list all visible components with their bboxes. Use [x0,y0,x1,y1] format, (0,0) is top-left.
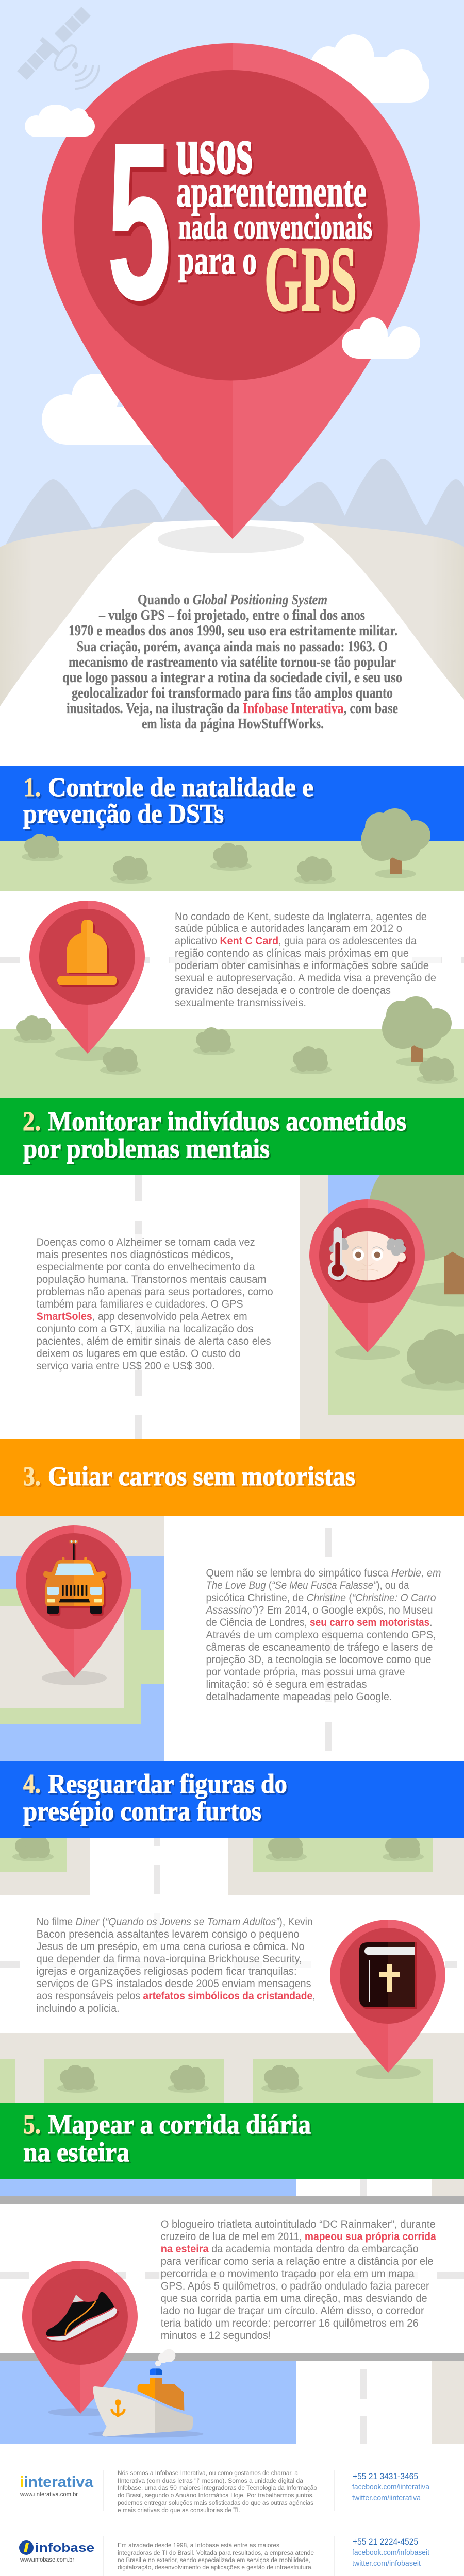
footer: iinterativa logo: i [20,2474,24,2490]
footer: infobase description: integradoras de TI do Brasil. Voltada para resultados, a empresa atende [118,2550,314,2556]
title words: para o [178,238,257,282]
icon: running shoe [46,2292,119,2342]
section 2 body text: problemas não apenas para seus portadores, como [37,1286,273,1298]
section 2 road dashes [135,1175,142,1439]
section 3 body text: Quem não se lembra do simpático fusca Herbie, em [206,1567,441,1579]
footer: infobase logo [19,2540,94,2563]
panel: section 2 map [300,1124,464,1439]
section 1 body text: gravidez não desejada e o controle de doenças [175,985,391,996]
section 5 body text: que sua corrida partia em uma direção, mas desviando de [161,2293,427,2304]
section 4 body text: incluindo a polícia. [37,2003,120,2014]
intro text: que logo passou a integrar a rotina da sociedade civil, e seu uso [62,670,402,686]
pin 1 with condom icon [29,901,145,1054]
heading 5: 5. [23,2110,41,2140]
heading 2: 2. [23,1107,41,1137]
panel: section 5 map [0,2179,464,2444]
panel: section 4 map bottom [0,2033,464,2103]
icon: big map pin [42,43,420,539]
section 1 body text: região contendo as clínicas mais próximas em que [175,947,409,959]
cloud: top right [309,34,429,103]
section 2 body text: população humana. Transtornos mentais causam [37,1274,267,1285]
heading 5 [23,2110,311,2167]
section 5 body text: O blogueiro triatleta autointitulado “DC Rainmaker”, durante [161,2218,436,2230]
section 2 body text [37,1236,273,1372]
footer: infobase description [118,2543,314,2571]
section 3 body text: por vontade própria, mas possui uma grave [206,1666,405,1678]
section 3 body text: limitação: só é segura em estradas [206,1679,367,1690]
section 3 body text: projeção 3D, a tecnologia se locomove como que [206,1654,431,1666]
footer: iinterativa logo: interativa [24,2474,94,2490]
section 4 body text: aos responsáveis pelos artefatos simbólicos da cristandade, [37,1990,316,2002]
panel: section 1 header [0,766,464,841]
panel: hero background sky [0,0,464,567]
icon: elderly man face and thermometer [328,1227,407,1282]
heading 1: 1. [24,773,41,803]
title number 5: 5 [107,96,172,347]
footer: infobase contacts [352,2537,430,2568]
title words: usos [176,114,253,188]
section 2 body text: conjunto com a GTX, auxilia na localização dos [37,1323,254,1335]
pin 1 shadow [55,1046,120,1061]
section 5 body text: teria batido um recorde: percorrer 16 quilômetros em 26 [161,2317,419,2329]
heading 4: Resguardar figuras do [48,1769,287,1799]
pin 5 with running shoe icon [22,2261,138,2414]
section 1 body text: poderiam obter camisinhas e informações sobre saúde [175,960,429,972]
cloud: left over pin [25,105,95,137]
intro text [62,592,402,732]
title words: GPS [264,228,357,330]
heading 3: 3. [23,1462,41,1492]
pin 3 shadow [42,1671,107,1685]
intro text: Quando o Global Positioning System [138,592,327,608]
section 3 body text: The Love Bug (“Se Meu Fusca Falasse”), ou da [206,1580,409,1591]
section 4 body text [37,1916,316,2014]
footer: iinterativa contacts: +55 21 3431-3465 [353,2471,418,2481]
icon: self-driving car [43,1540,107,1616]
section 5 body text: cruzeiro de lua de mel em 2011, mapeou sua própria corrida [161,2231,436,2243]
section 1 body text: sexual e autopreservação. A medida visa a prevenção de [175,972,436,984]
footer: infobase description: no Brasil e no exterior, sendo especializada em serviços de mobilidade, [118,2557,310,2564]
footer: iinterativa logo [20,2474,94,2498]
footer: iinterativa description: IInterativa (com duas letras "i" mesmo). Somos a unidade digital da [118,2478,304,2484]
section 5 body text: GPS. Após 5 quilômetros, o padrão ondulado fazia parecer [161,2280,429,2292]
icon: satellite [17,7,99,89]
icon: bible [359,1942,417,2009]
big pin shadow [158,526,304,553]
heading 4: presépio contra furtos [23,1797,261,1826]
hills [0,522,464,766]
panel: section 2 header [0,1098,464,1175]
heading 2: Monitorar indivíduos acometidos [48,1107,406,1137]
heading 1 [23,773,313,829]
footer: iinterativa contacts [352,2471,430,2502]
intro text: – vulgo GPS – foi projetado, entre o final dos anos [98,607,365,623]
heading 5: Mapear a corrida diária [48,2110,311,2140]
section 3 body text: câmeras de escaneamento de tráfego e lasers de [206,1641,433,1653]
section 2 body text: SmartSoles, app desenvolvido pela Aetrex em [37,1311,247,1323]
section 1 body text: saúde pública e autoridades lançaram em 2012 o [175,923,402,935]
intro text: inusitados. Veja, na ilustração da Infobase Interativa, com base [67,701,398,717]
icon: ship [88,2349,204,2438]
section 4 body text: Bacon presencia assaltantes levarem consigo o pequeno [37,1928,300,1940]
section 2 body text: serviço varia entre US$ 200 e US$ 300. [37,1360,215,1372]
section 5 body text: na esteira da academia montada dentro da embarcação [161,2243,419,2255]
heading 2: por problemas mentais [23,1134,270,1164]
section 4 body text: serviços de GPS instalados desde 2005 enviam mensagens [37,1978,311,1990]
intro text: geolocalizador foi transformado para fins tão amplos quanto [72,685,393,701]
panel: section 3 map [0,1516,164,1761]
section 2 body text: especialmente por conta do envelhecimento da [37,1261,255,1273]
section 3 body text: psicótica Christine, de Christine (“Christine: O Carro [206,1592,436,1604]
footer: infobase logo: www.infobase.com.br [20,2557,74,2563]
panel: section 4 map top [0,1834,464,1895]
section 5 body text: lado no lugar de traçar um círculo. Além disso, o corredor [161,2305,424,2317]
section 5 body text: percorrida e o movimento traçado por ela em um mapa [161,2268,415,2280]
section 3 body text: Assassino”)? Em 2014, o Google expôs, no Museu [205,1604,433,1616]
pin 4 shadow [356,2065,421,2079]
section 5 body text: minutos e 12 segundos! [161,2330,271,2342]
heading 4: 4. [23,1769,41,1799]
road [0,520,464,766]
section 3 body text: detalhadamente mapeadas pelo Google. [206,1691,392,1703]
footer: iinterativa description: Infobase, uma das 50 maiores integradoras de Tecnologia da Informação [118,2485,317,2492]
section 5 body text [161,2218,436,2342]
title [107,96,372,347]
heading 5: na esteira [23,2138,129,2167]
title words [176,114,372,330]
section 2 body text: também para familiares e cuidadores. O GPS [37,1298,243,1310]
footer: infobase description: digitalização, desenvolvimento de aplicações e gestão de infraestrutura. [118,2565,313,2571]
intro text: 1970 e meados dos anos 1990, seu uso era estritamente militar. [69,623,397,639]
section 4 body text: No filme Diner (“Quando os Jovens se Tornam Adultos”), Kevin [37,1916,313,1928]
pin 5 shadow [48,2408,113,2416]
footer: infobase contacts: facebook.com/infobaseit [352,2548,430,2557]
title words: aparentemente [176,166,367,216]
section 3 body text: Através de um complexo esquema contendo GPS, [206,1629,436,1641]
footer: dividers row 2 [103,2536,335,2576]
cloud: lower left [42,374,157,445]
mountains [0,459,464,567]
section 5 body text: para verificar como seria a relação entre a distância por ele [161,2256,434,2267]
footer: infobase contacts: +55 21 2224-4525 [353,2537,418,2547]
footer: iinterativa description: do Brasil, segundo o Anuário Informática Hoje. Por trabalharmos juntos, [118,2493,314,2499]
heading 2 [23,1107,406,1164]
footer: iinterativa description: e mais criativas do que as consultorias de TI. [118,2507,240,2514]
intro text: mecanismo de rastreamento via satélite tornou-se tão popular [69,654,396,670]
heading 3: Guiar carros sem motoristas [48,1462,355,1492]
intro text: em lista da página HowStuffWorks. [142,716,324,732]
pin 2 shadow [335,1345,400,1360]
section 1 body text [175,911,436,1009]
section 4 body text: igrejas e organizações religiosas podem ficar tranquilas: [37,1965,297,1977]
footer: iinterativa description: Nós somos a Infobase Interativa, ou como gostamos de chamar, a [118,2470,299,2477]
section 4 body text: Jesus de um presépio, em uma cena curiosa e cômica. No [37,1941,305,1953]
section 2 body text: deixem os lugares em que estão. O custo do [37,1348,241,1360]
section 2 body text: mais presentes nos diagnósticos médicos, [37,1249,234,1261]
bushes and tree: lower band [14,996,458,1084]
section 1 body text: No condado de Kent, sudeste da Inglaterra, agentes de [175,911,427,923]
heading 1: Controle de natalidade e [48,773,313,803]
footer: infobase contacts: twitter.com/infobaseit [352,2559,421,2568]
panel: section 3 header [0,1439,464,1516]
footer: infobase description: Em atividade desde 1998, a Infobase está entre as maiores [118,2543,279,2549]
section 4 body text: que depender da firma nova-iorquina Brickhouse Security, [37,1953,302,1965]
section 2 body text: pacientes, além de emitir sinais de alerta caso eles [37,1335,271,1347]
section 3 body text [205,1567,441,1703]
section 1 body text: sexualmente transmissíveis. [175,997,306,1009]
section 3 road dashes [325,1528,332,1751]
section 3 body text: de Ciência de Londres, seu carro sem motoristas. [206,1617,432,1629]
pin 3 with car icon [16,1525,131,1678]
panel: section 4 header [0,1761,464,1838]
panel: section 1 map [0,841,464,1098]
pin 2 with elderly man icon [309,1199,425,1352]
heading 1: prevenção de DSTs [23,799,224,829]
section 1 body text: aplicativo Kent C Card, guia para os adolescentes da [175,935,417,947]
footer: iinterativa description [118,2470,317,2514]
footer: iinterativa description: podemos entregar soluções mais sofisticadas do que as outras agências [118,2500,313,2506]
bushes and tree: upper band [22,808,430,884]
section 4 road dashes [0,1838,457,1968]
intro text: Sua criação, porém, avança ainda mais no passado: 1963. O [77,639,388,655]
panel: section 5 header [0,2103,464,2179]
footer: dividers row 1 [103,2470,335,2511]
section 2 body text: Doenças como o Alzheimer se tornam cada vez [37,1236,255,1248]
pin 4 with bible icon [330,1920,445,2073]
footer: iinterativa contacts: twitter.com/iinterativa [352,2494,421,2502]
heading 4 [23,1769,287,1826]
footer: iinterativa logo: www.iinterativa.com.br [20,2492,78,2498]
cloud: bottom right over pin [342,317,420,359]
footer: infobase logo: infobase [35,2541,94,2555]
footer: iinterativa contacts: facebook.com/iinterativa [352,2483,430,2492]
